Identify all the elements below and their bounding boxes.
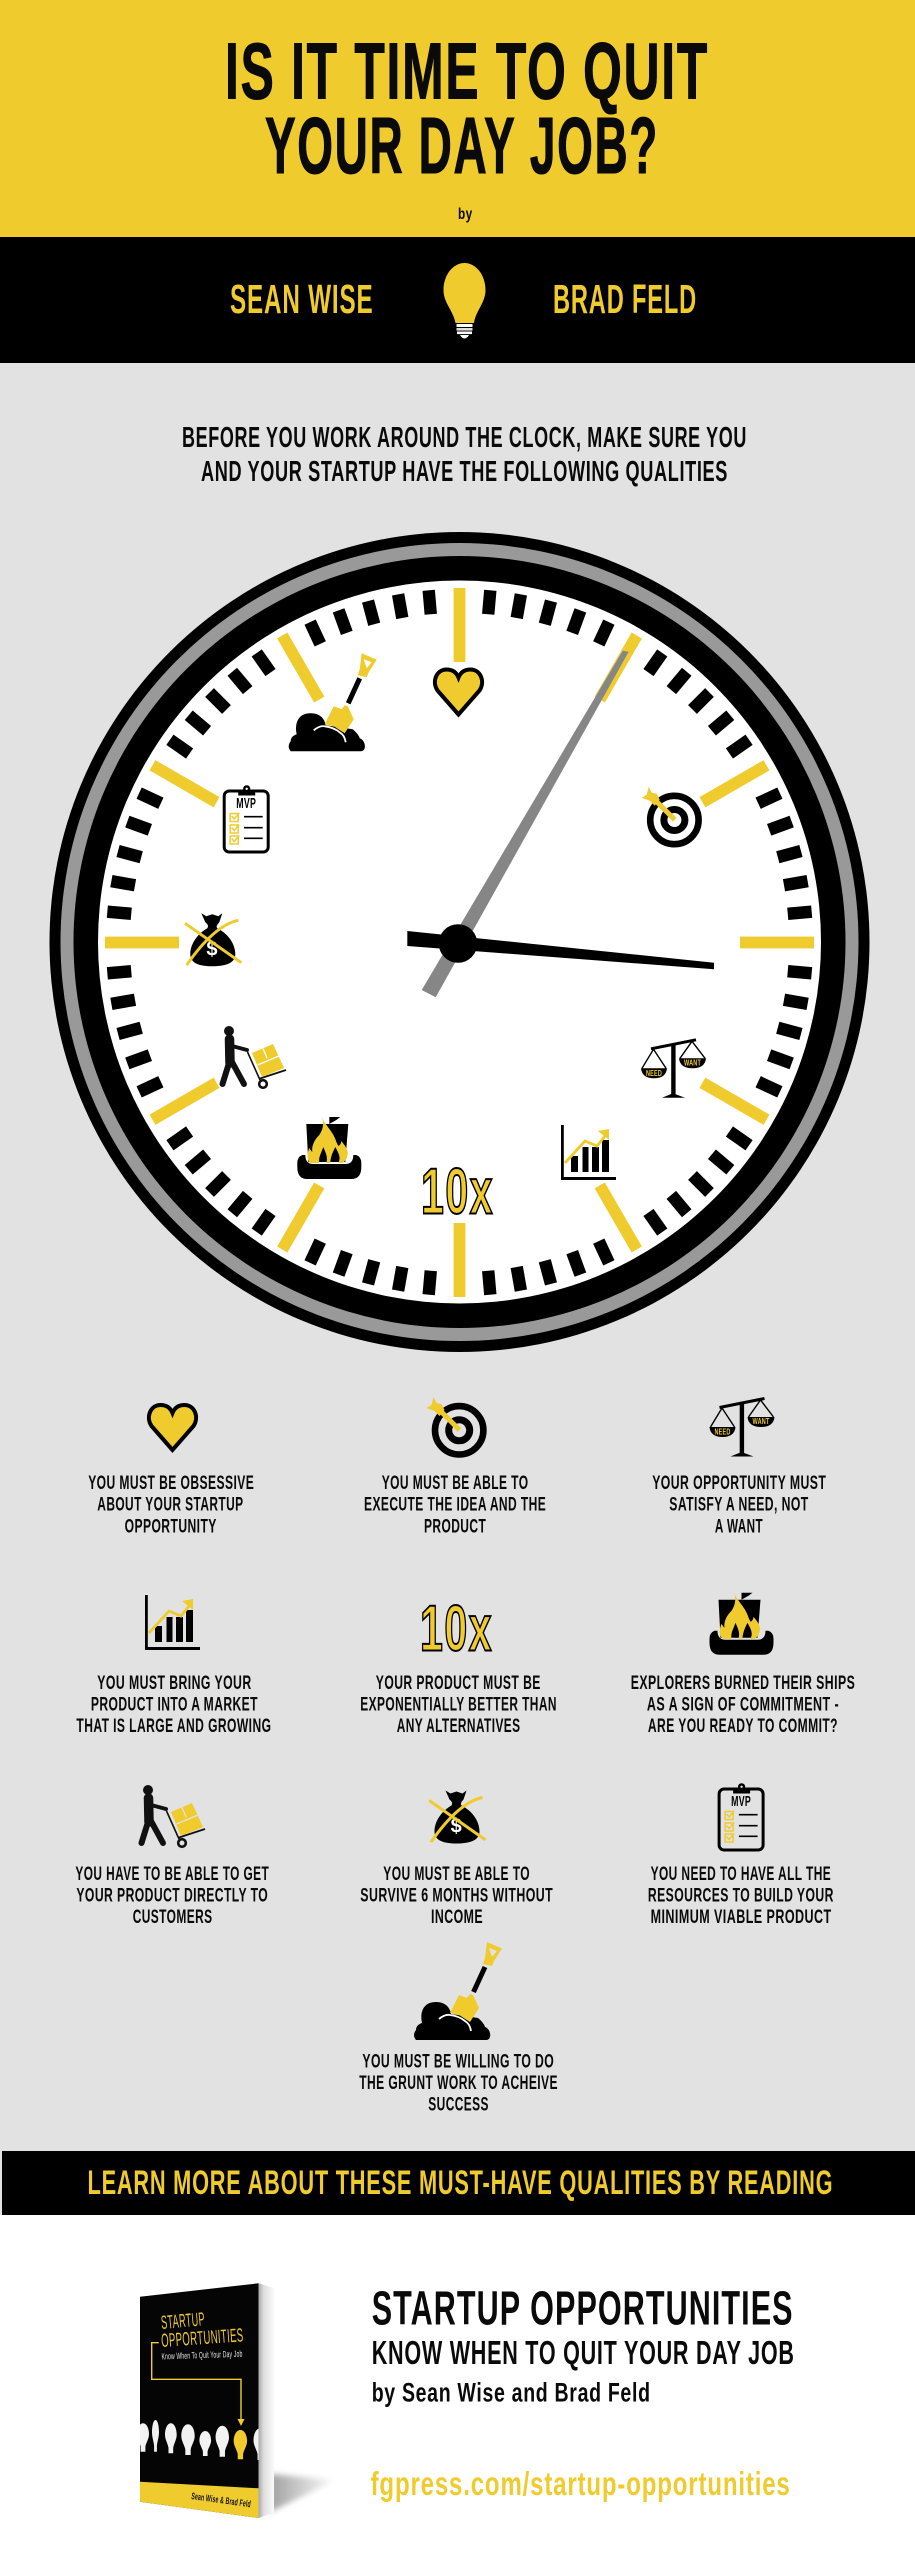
caption: OPPORTUNITY (125, 1515, 217, 1537)
book title (160, 2309, 244, 2361)
clock minute hand (422, 651, 629, 997)
caption: EXECUTE THE IDEA AND THE (364, 1494, 546, 1516)
icon: growth chart (145, 1595, 200, 1650)
caption: YOU MUST BE ABLE TO (383, 1863, 530, 1885)
caption: INCOME (431, 1906, 483, 1928)
book authors line: by Sean Wise and Brad Feld (372, 2378, 651, 2408)
clock icon: MVP clipboard (224, 785, 268, 852)
caption: YOU MUST BE ABLE TO (382, 1472, 528, 1494)
clock hour hand (407, 931, 714, 969)
clock hour ticks (105, 588, 814, 1297)
author: Brad Feld: BRAD FELD (553, 276, 697, 322)
caption (360, 1672, 557, 1737)
book bulbs (137, 2420, 267, 2460)
caption: PRODUCT INTO A MARKET (91, 1694, 258, 1716)
clock icon: MVP clipboard: MVP (236, 795, 256, 812)
clock icon: money bag crossed out: $ (206, 938, 218, 960)
book title: OPPORTUNITIES (160, 2325, 244, 2352)
clock minute ticks (107, 590, 812, 1295)
icon: scale: WANT (752, 1417, 770, 1426)
quality: need not want (652, 1398, 826, 1537)
caption: SUCCESS (428, 2094, 489, 2116)
quality: exponentially better (360, 1592, 557, 1737)
clock (50, 532, 870, 1352)
quality: execute (364, 1397, 546, 1537)
clock icon: scale: WANT (684, 1058, 701, 1067)
caption (75, 1863, 269, 1928)
quality: minimum viable product (648, 1783, 834, 1928)
caption (359, 2050, 558, 2116)
caption: THE GRUNT WORK TO ACHEIVE (359, 2072, 558, 2094)
caption: SURVIVE 6 MONTHS WITHOUT (360, 1884, 553, 1906)
icon: heart (149, 1405, 196, 1450)
clock centre hub (439, 924, 477, 963)
quality: growing market (76, 1595, 271, 1737)
intro text (182, 422, 747, 488)
quality: survive six months (360, 1790, 553, 1928)
icon: money bag crossed out: $ (451, 1816, 462, 1838)
caption: YOU MUST BE WILLING TO DO (362, 2050, 554, 2072)
clock icon: 10x: 10x (421, 1155, 494, 1228)
caption: ABOUT YOUR STARTUP (97, 1494, 244, 1516)
icon: scale: NEED (714, 1428, 730, 1436)
icon: light bulb (444, 263, 486, 338)
caption: ANY ALTERNATIVES (397, 1715, 520, 1737)
caption: A WANT (715, 1515, 763, 1537)
icon: MVP clipboard: MVP (731, 1793, 751, 1810)
quality: obsessive (88, 1405, 254, 1537)
caption: THAT IS LARGE AND GROWING (76, 1715, 271, 1737)
caption (88, 1472, 254, 1537)
author: Sean Wise: SEAN WISE (230, 276, 374, 322)
book front (140, 2283, 258, 2518)
clock icon: scale (641, 1040, 706, 1098)
byline word: by (458, 206, 473, 223)
caption (631, 1672, 855, 1737)
clock icon: scale: NEED (646, 1069, 662, 1078)
book title: STARTUP (160, 2309, 206, 2334)
caption: CUSTOMERS (133, 1906, 212, 1928)
clock rim (50, 532, 870, 1352)
book pages (258, 2283, 274, 2518)
quality: commitment (631, 1591, 855, 1737)
book shadow (270, 2474, 336, 2512)
panel: footer background (0, 2215, 915, 2560)
book yellow strip (140, 2482, 258, 2518)
caption (648, 1863, 834, 1928)
book cover (137, 2283, 336, 2518)
clock icon: money bag crossed out (185, 913, 241, 966)
book authors: Sean Wise & Brad Feld (191, 2491, 252, 2510)
clock icon: burning ship (297, 1115, 361, 1179)
clock icon: shovel and dirt (289, 653, 377, 751)
caption (364, 1472, 546, 1537)
caption: PRODUCT (424, 1515, 486, 1537)
clock icon: target (642, 787, 699, 844)
title (225, 26, 709, 190)
icon: scale (710, 1398, 774, 1456)
icon: money bag crossed out (429, 1790, 486, 1844)
caption: YOU HAVE TO BE ABLE TO GET (75, 1863, 269, 1885)
caption: EXPONENTIALLY BETTER THAN (360, 1694, 557, 1716)
caption (76, 1672, 271, 1737)
icon: shovel and dirt (414, 1942, 502, 2040)
book arrow (152, 2343, 244, 2426)
quality: grunt work (359, 1942, 558, 2116)
panel: call to action banner (2, 2151, 915, 2215)
icon: MVP clipboard (719, 1783, 763, 1850)
icon: burning ship (710, 1591, 774, 1655)
clock icon: growth chart (561, 1125, 616, 1180)
panel: yellow title band (0, 0, 915, 237)
clock icon: heart (435, 670, 482, 714)
caption (360, 1863, 553, 1928)
panel: authors band (0, 237, 915, 363)
panel: grey main background (0, 363, 915, 2151)
icon: 10x: 10x (420, 1592, 493, 1664)
quality: direct to customers (75, 1785, 269, 1928)
caption: YOUR PRODUCT MUST BE (376, 1672, 541, 1694)
caption: YOU MUST BE OBSESSIVE (88, 1472, 254, 1494)
icon: target (426, 1397, 483, 1454)
caption (652, 1472, 826, 1537)
book title: Know When To Quit Your Day Job (161, 2349, 243, 2361)
clock icon: hand truck delivery (222, 1026, 286, 1088)
caption: YOU MUST BRING YOUR (97, 1672, 252, 1694)
icon: hand truck delivery (142, 1785, 205, 1847)
caption: YOUR PRODUCT DIRECTLY TO (76, 1884, 268, 1906)
caption: SATISFY A NEED, NOT (669, 1494, 809, 1516)
